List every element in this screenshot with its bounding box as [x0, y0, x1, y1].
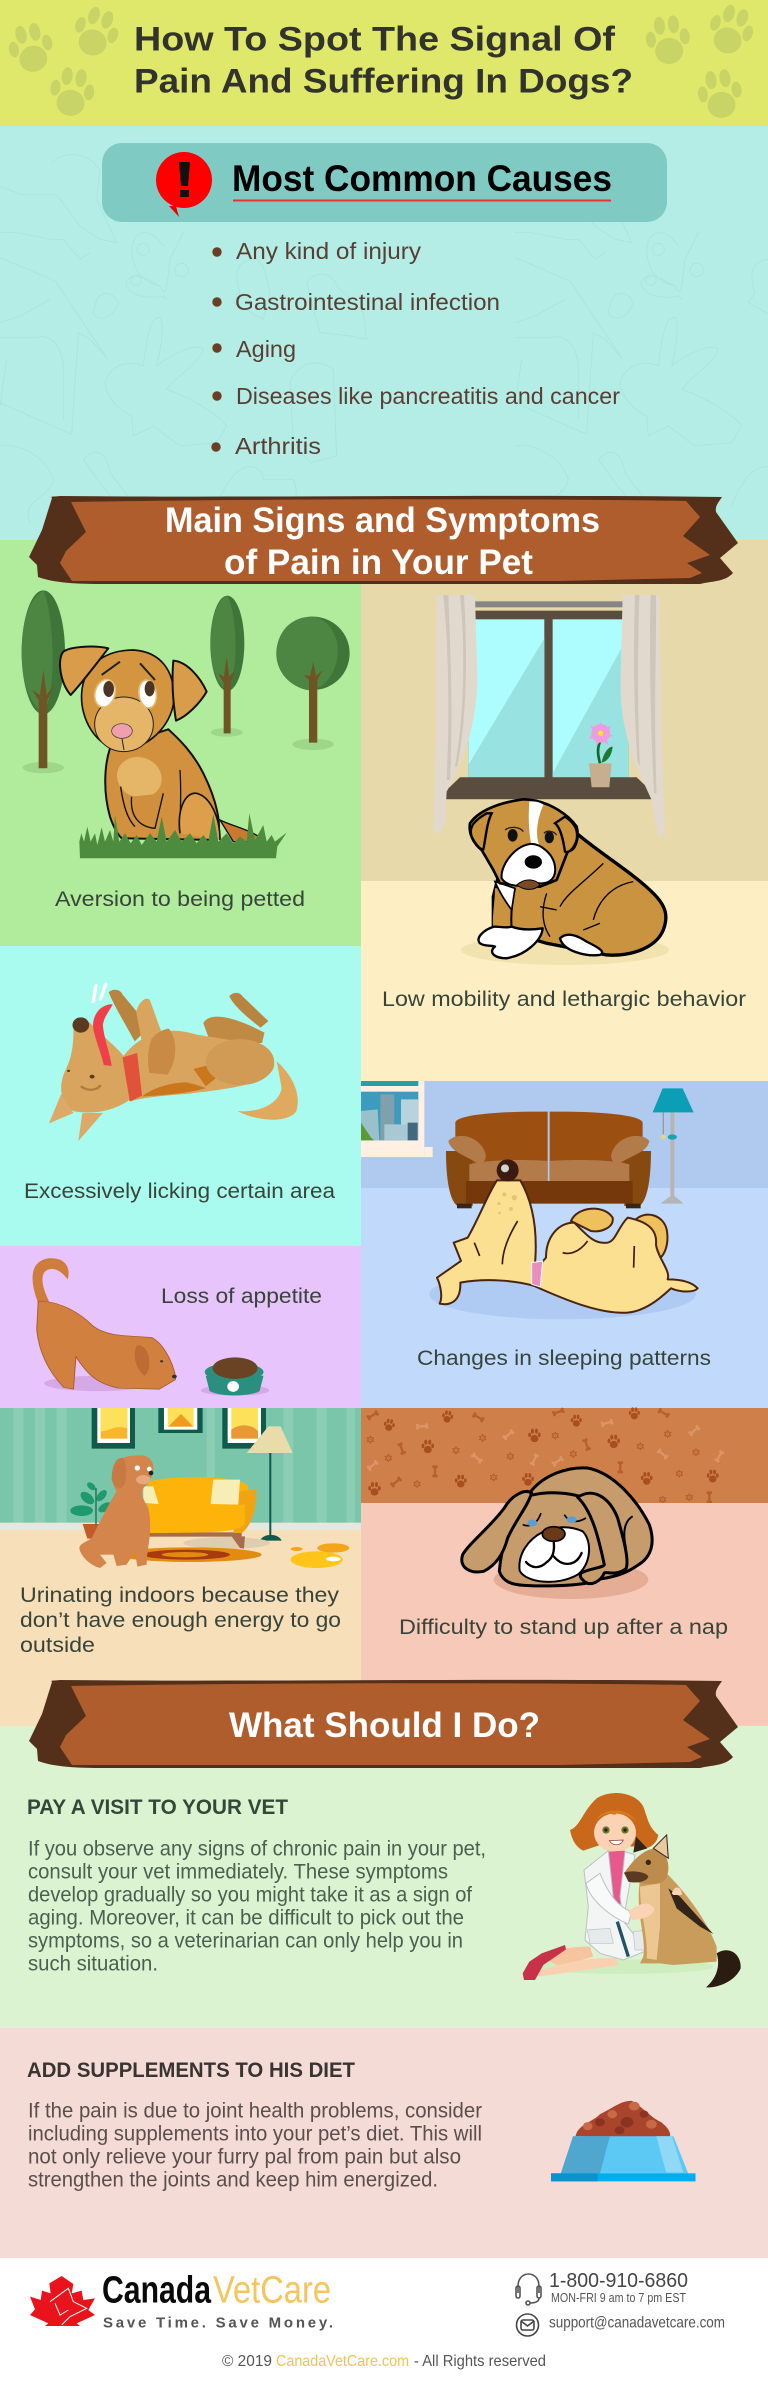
copyright: © 2019 [222, 2353, 272, 2370]
flower pot [598, 742, 600, 763]
illustration: window with curtains [433, 595, 665, 837]
body text: If you observe any signs of chronic pain in your pet, [28, 1838, 486, 1860]
logo: wordmark: VetCare [213, 2270, 331, 2312]
dog left ear [462, 1492, 532, 1572]
copyright [222, 2353, 546, 2370]
illustration: vet hugging a german shepherd [523, 1793, 741, 1987]
panel: difficulty to stand up [361, 1407, 768, 1726]
dog tail [220, 820, 265, 842]
logo: wordmark [102, 2270, 333, 2332]
dog back [531, 1468, 652, 1580]
vet [570, 1793, 658, 1851]
dog [79, 1455, 154, 1568]
illustration: dog licking itself [49, 984, 298, 1141]
panel: excessively licking certain area [0, 946, 361, 1246]
icon: headset [516, 2274, 541, 2305]
body text: including supplements into your pet’s diet. This will [28, 2122, 482, 2146]
rug [118, 1547, 262, 1562]
title [134, 20, 633, 100]
curtains [433, 595, 477, 833]
phone contact: 1-800-910-6860 [549, 2270, 688, 2292]
dog right ear [578, 1493, 627, 1584]
body text: not only relieve your furry pal from pain but also [28, 2146, 461, 2168]
causes list: Gastrointestinal infection [235, 289, 500, 315]
illustration: living room with puddle [0, 1408, 361, 1568]
phone contact: MON-FRI 9 am to 7 pm EST [551, 2291, 686, 2305]
floor lamp [670, 1112, 674, 1196]
logo: wordmark: Save Time. Save Money. [103, 2314, 333, 2332]
illustration: tired dog lying down [462, 1468, 652, 1599]
body text: symptoms, so a veterinarian can only help you in [28, 1930, 463, 1952]
background pattern of pets [0, 154, 768, 523]
wallpaper of bones and paws [366, 1407, 725, 1504]
caption: don’t have enough energy to go [20, 1608, 341, 1632]
wooden banner: main signs and symptoms: of Pain in Your Pet [224, 543, 533, 582]
causes list: Arthritis [235, 433, 321, 459]
body text: If the pain is due to joint health problems, consider [28, 2100, 482, 2122]
panel: aversion to being petted [0, 540, 361, 946]
wooden banner: what should i do [29, 1680, 738, 1768]
panel: changes in sleeping patterns [361, 1081, 768, 1408]
wooden banner: main signs and symptoms [29, 496, 738, 584]
causes list: Aging [236, 336, 296, 362]
illustration: sad dog among trees [22, 590, 350, 858]
body text [28, 2100, 482, 2192]
dog head [499, 1493, 606, 1586]
illustration: dog sleeping upside down [429, 1159, 698, 1319]
floor lamp [269, 1451, 271, 1536]
heading: PAY A VISIT TO YOUR VET [27, 1795, 288, 1819]
illustration: bowl of kibble [551, 2101, 696, 2181]
icon: mail [516, 2314, 538, 2336]
panel: low mobility and lethargic behavior [361, 540, 768, 1081]
heading: ADD SUPPLEMENTS TO HIS DIET [27, 2058, 355, 2082]
illustration: dog bowing to food bowl [33, 1258, 269, 1396]
dog head [82, 650, 174, 750]
wooden banner: main signs and symptoms: Main Signs and Symptoms [165, 501, 600, 540]
title: Pain And Suffering In Dogs? [134, 62, 633, 100]
dog body [105, 729, 219, 840]
illustration: sad bulldog puppy [461, 799, 669, 965]
footer [0, 2258, 768, 2381]
framed pictures [92, 1408, 135, 1449]
panel: causes [0, 126, 768, 546]
body text: consult your vet immediately. These symptoms [28, 1860, 448, 1884]
wooden banner: what should i do: What Should I Do? [229, 1706, 540, 1745]
causes list: Any kind of injury [236, 238, 422, 264]
header band [0, 0, 768, 126]
dog [639, 1873, 717, 1965]
plant [83, 1524, 102, 1539]
panel: add supplements to his diet [0, 2028, 768, 2258]
causes list [211, 238, 620, 459]
caption: Urinating indoors because they [20, 1583, 339, 1607]
caption: Low mobility and lethargic behavior [382, 987, 746, 1011]
body text: such situation. [28, 1952, 158, 1976]
panel: urinating indoors [0, 1408, 361, 1726]
body text: aging. Moreover, it can be difficult to pick out the [28, 1906, 464, 1930]
dog muzzle [519, 1527, 589, 1582]
caption: Loss of appetite [161, 1284, 322, 1308]
body text: strengthen the joints and keep him energized. [28, 2168, 438, 2192]
icon: paw prints left [4, 2, 124, 119]
caption: outside [20, 1633, 95, 1657]
sofa [183, 1537, 270, 1549]
email contact: support@canadavetcare.com [549, 2314, 725, 2332]
caption: Aversion to being petted [55, 887, 305, 911]
causes heading bar [102, 143, 667, 222]
phone contact [549, 2270, 688, 2305]
body text: develop gradually so you might take it as a sign of [28, 1884, 472, 1906]
copyright: - All Rights reserved [414, 2353, 546, 2370]
logo: maple leaf [30, 2276, 95, 2326]
illustration: living room window and sofa [361, 1081, 694, 1208]
puppy front legs [493, 888, 547, 930]
causes heading text: Most Common Causes [232, 158, 612, 199]
icon: paw prints right [644, 0, 759, 121]
icon: exclamation speech bubble [156, 152, 212, 217]
puddle [291, 1551, 343, 1568]
caption [20, 1583, 341, 1657]
grass [79, 813, 287, 858]
causes list: Diseases like pancreatitis and cancer [236, 383, 620, 409]
caption: Excessively licking certain area [24, 1179, 335, 1203]
logo: wordmark: Canada [102, 2270, 212, 2312]
caption: Difficulty to stand up after a nap [399, 1615, 728, 1639]
copyright: CanadaVetCare.com [276, 2353, 409, 2370]
title: How To Spot The Signal Of [134, 20, 616, 58]
panel: loss of appetite [0, 1246, 361, 1408]
panel: pay a visit to your vet [0, 1726, 768, 2028]
body text [28, 1838, 486, 1976]
caption: Changes in sleeping patterns [417, 1346, 711, 1370]
